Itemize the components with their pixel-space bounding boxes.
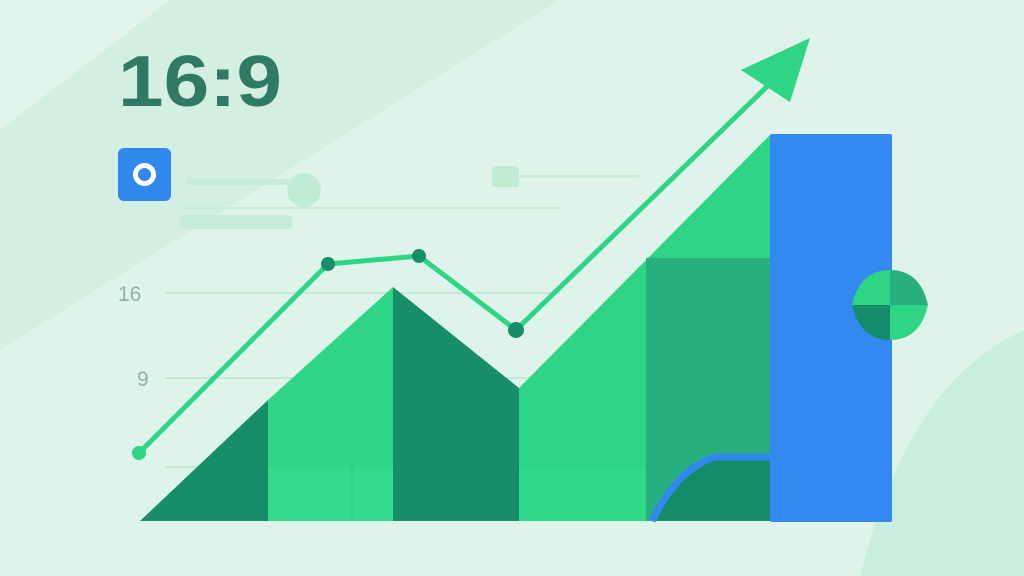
title: 16:9 xyxy=(118,42,282,122)
axis label 16: 16 xyxy=(118,283,141,306)
icon: quartered circle xyxy=(852,270,928,340)
grid lines xyxy=(165,293,560,467)
trend line with arrow xyxy=(132,38,810,460)
icon: blue app badge xyxy=(118,148,171,201)
axis label 9: 9 xyxy=(137,368,149,391)
area chart xyxy=(140,134,892,522)
decorative slider ui xyxy=(180,166,639,229)
